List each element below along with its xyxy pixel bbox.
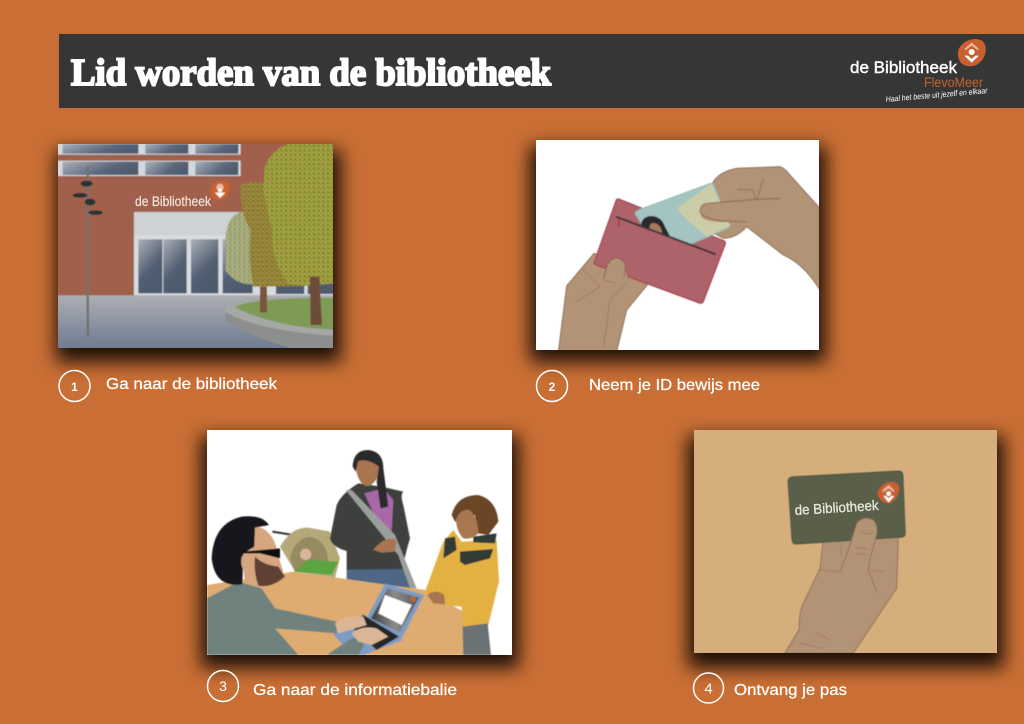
illustration: people at desk [207, 430, 512, 655]
header bar [59, 34, 1024, 108]
shadow [201, 436, 519, 668]
step 4 label: Ontvang je pas [734, 682, 847, 699]
step 1 label: Ga naar de bibliotheek [106, 376, 278, 393]
step 3 label: Ga naar de informatiebalie [253, 682, 457, 699]
illustration: hand holding card [694, 430, 997, 653]
shadow [688, 436, 1004, 668]
step 2 number badge [536, 370, 568, 402]
panel: step 1 library building [56, 143, 341, 362]
logo wordmark: de Bibliotheek [850, 58, 957, 77]
step 4 number badge [694, 673, 724, 703]
step 1 number badge [59, 370, 90, 402]
step 3 number badge [208, 670, 238, 702]
step 2 number badge: 2 [549, 380, 556, 394]
step 3 number badge: 3 [219, 678, 227, 694]
logo mark [958, 39, 986, 66]
step 1 number badge: 1 [71, 380, 78, 394]
shadow [56, 150, 341, 362]
logo tagline: Haal het beste uit jezelf en elkaar [885, 86, 988, 104]
illustration: hands with wallet and ID [536, 140, 820, 352]
panel: step 3 information desk [201, 430, 519, 668]
illustration: library facade [57, 143, 335, 350]
step 2 label: Neem je ID bewijs mee [589, 377, 760, 394]
title: Lid worden van de bibliotheek [71, 52, 552, 94]
panel: step 2 ID card and wallet [530, 140, 826, 362]
panel: step 4 library card [688, 430, 1004, 668]
shadow [530, 146, 826, 362]
card wordmark: de Bibliotheek [794, 497, 880, 518]
logo region name: FlevoMeer [924, 74, 983, 90]
logo: de Bibliotheek FlevoMeer [850, 39, 988, 104]
building sign: de Bibliotheek [135, 194, 211, 209]
step 4 number badge: 4 [704, 680, 713, 698]
